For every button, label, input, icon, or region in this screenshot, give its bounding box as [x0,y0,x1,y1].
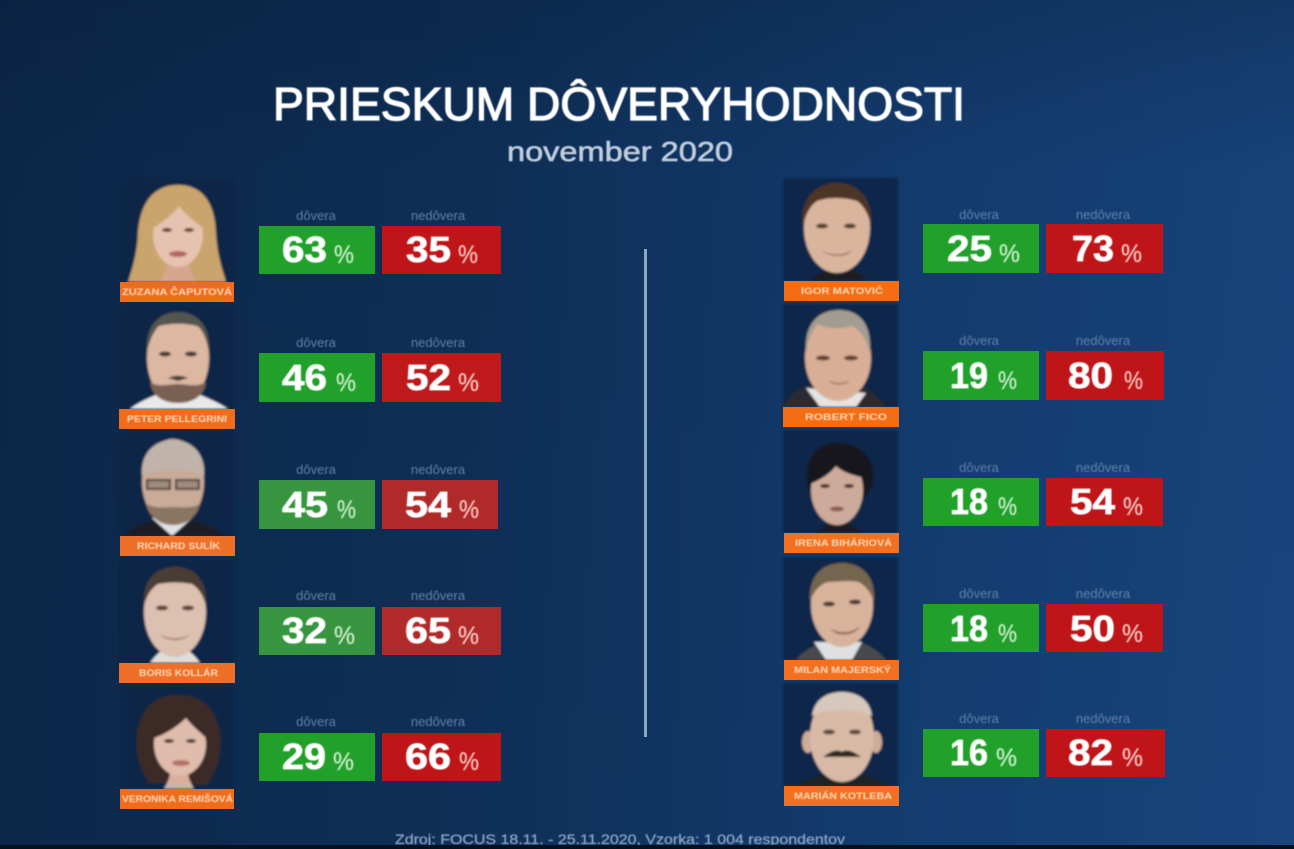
portrait: Milan Majerský [783,557,898,660]
distrust: 65 [405,610,451,651]
distrust: % [458,369,479,397]
distrust: % [459,748,479,776]
distrust: nedôvera [1076,586,1131,601]
bottom edge [0,845,1294,849]
distrust: nedôvera [1076,460,1131,475]
divider [644,249,647,737]
distrust [1046,586,1163,652]
trust: % [333,748,354,776]
name label: PETER PELLEGRINI [127,414,227,424]
trust [259,208,375,274]
name label [784,786,899,806]
distrust: 54 [405,484,451,525]
name label [119,663,235,683]
trust: dôvera [959,207,1000,222]
distrust: 80 [1068,355,1113,396]
distrust: % [1123,493,1143,521]
row: Boris Kollár [119,559,501,683]
distrust [382,714,501,781]
trust: 18 [950,481,988,522]
trust [259,462,375,529]
name label [119,409,235,429]
trust: 25 [947,228,992,269]
portrait: Robert Fico [783,304,898,407]
distrust: nedôvera [411,208,466,223]
distrust [382,208,501,274]
portrait: Marián Kotleba [783,683,898,786]
distrust: % [1122,744,1143,772]
portrait: Zuzana Čaputová [120,178,235,282]
distrust: % [1121,240,1142,268]
trust: % [337,496,356,524]
trust: % [998,493,1017,521]
trust: 19 [950,355,988,396]
distrust: nedôvera [411,335,466,350]
row: Peter Pellegrini [119,305,501,429]
row: Zuzana Čaputová [120,178,501,302]
trust [259,588,375,655]
name label [120,789,234,809]
trust [923,460,1039,526]
distrust: 54 [1070,481,1115,522]
row: Veronika Remišová [120,686,501,809]
portrait: Peter Pellegrini [120,305,235,409]
distrust: nedôvera [411,588,466,603]
row: Igor Matovič [783,178,1163,301]
distrust [1046,333,1164,400]
name label: RICHARD SULÍK [137,541,221,551]
portrait: Richard Sulík [120,432,235,536]
distrust: nedôvera [1076,333,1131,348]
distrust: nedôvera [411,714,466,729]
distrust: 66 [405,736,451,777]
trust [259,714,375,781]
trust: 63 [282,229,327,270]
trust: % [998,620,1017,648]
portrait: Igor Matovič [783,178,898,281]
source note: Zdroj: FOCUS 18.11. - 25.11.2020, Vzorka: 1 004 respondentov [395,831,845,847]
trust: % [996,744,1017,772]
trust: dôvera [296,335,337,350]
trust: % [998,367,1017,395]
row: Robert Fico [783,304,1164,427]
distrust [1046,711,1165,777]
trust [923,586,1039,652]
distrust: % [458,241,478,269]
row: Irena Bihariová [783,430,1163,553]
name label: MARIÁN KOTLEBA [794,791,893,801]
name label: MILAN MAJERSKÝ [794,664,891,675]
name label: IGOR MATOVIČ [801,285,884,296]
distrust: 35 [406,229,451,270]
row: Marián Kotleba [783,683,1165,806]
distrust: nedôvera [411,462,466,477]
name label: VERONIKA REMIŠOVÁ [122,793,234,804]
trust: % [334,622,355,650]
distrust: % [1122,620,1143,648]
trust: dôvera [959,460,1000,475]
name label [784,660,899,680]
name label [120,282,234,302]
trust: % [334,241,354,269]
distrust: 82 [1068,732,1113,773]
trust: dôvera [959,333,1000,348]
distrust: nedôvera [1076,207,1131,222]
title: PRIESKUM DÔVERYHODNOSTI [273,78,965,130]
trust: % [336,369,356,397]
trust [923,333,1039,400]
distrust: % [458,622,479,650]
trust: % [999,240,1020,268]
trust [259,335,375,402]
distrust [1046,460,1163,526]
name label [120,536,235,556]
trust: 32 [282,610,327,651]
distrust: nedôvera [1076,711,1131,726]
trust: dôvera [296,588,337,603]
name label [784,533,899,553]
trust [923,711,1039,777]
trust: dôvera [959,711,1000,726]
name label [783,407,899,427]
name label: ZUZANA ČAPUTOVÁ [122,286,233,297]
trust: 16 [950,732,988,773]
trust: dôvera [959,586,1000,601]
trust: 45 [282,484,328,525]
trust: 29 [282,736,326,777]
distrust: % [459,496,479,524]
distrust: 50 [1070,608,1115,649]
distrust [382,588,501,655]
distrust: 52 [406,357,451,398]
trust [923,207,1039,273]
name label: IRENA BIHÁRIOVÁ [795,538,893,548]
distrust [382,462,498,529]
distrust [382,335,501,402]
subtitle: november 2020 [507,136,733,167]
distrust [1046,207,1163,273]
trust: dôvera [296,462,337,477]
row: Milan Majerský [783,557,1163,680]
name label: ROBERT FICO [805,412,887,422]
trust: 46 [282,357,327,398]
distrust: 73 [1072,228,1114,269]
trust: dôvera [296,714,337,729]
trust: 18 [950,608,988,649]
row: Richard Sulík [120,432,498,556]
portrait: Veronika Remišová [122,686,233,789]
portrait: Irena Bihariová [783,430,898,533]
distrust: % [1124,367,1143,395]
portrait: Boris Kollár [120,559,235,663]
trust: dôvera [296,208,337,223]
name label [784,281,899,301]
name label: BORIS KOLLÁR [139,668,219,678]
